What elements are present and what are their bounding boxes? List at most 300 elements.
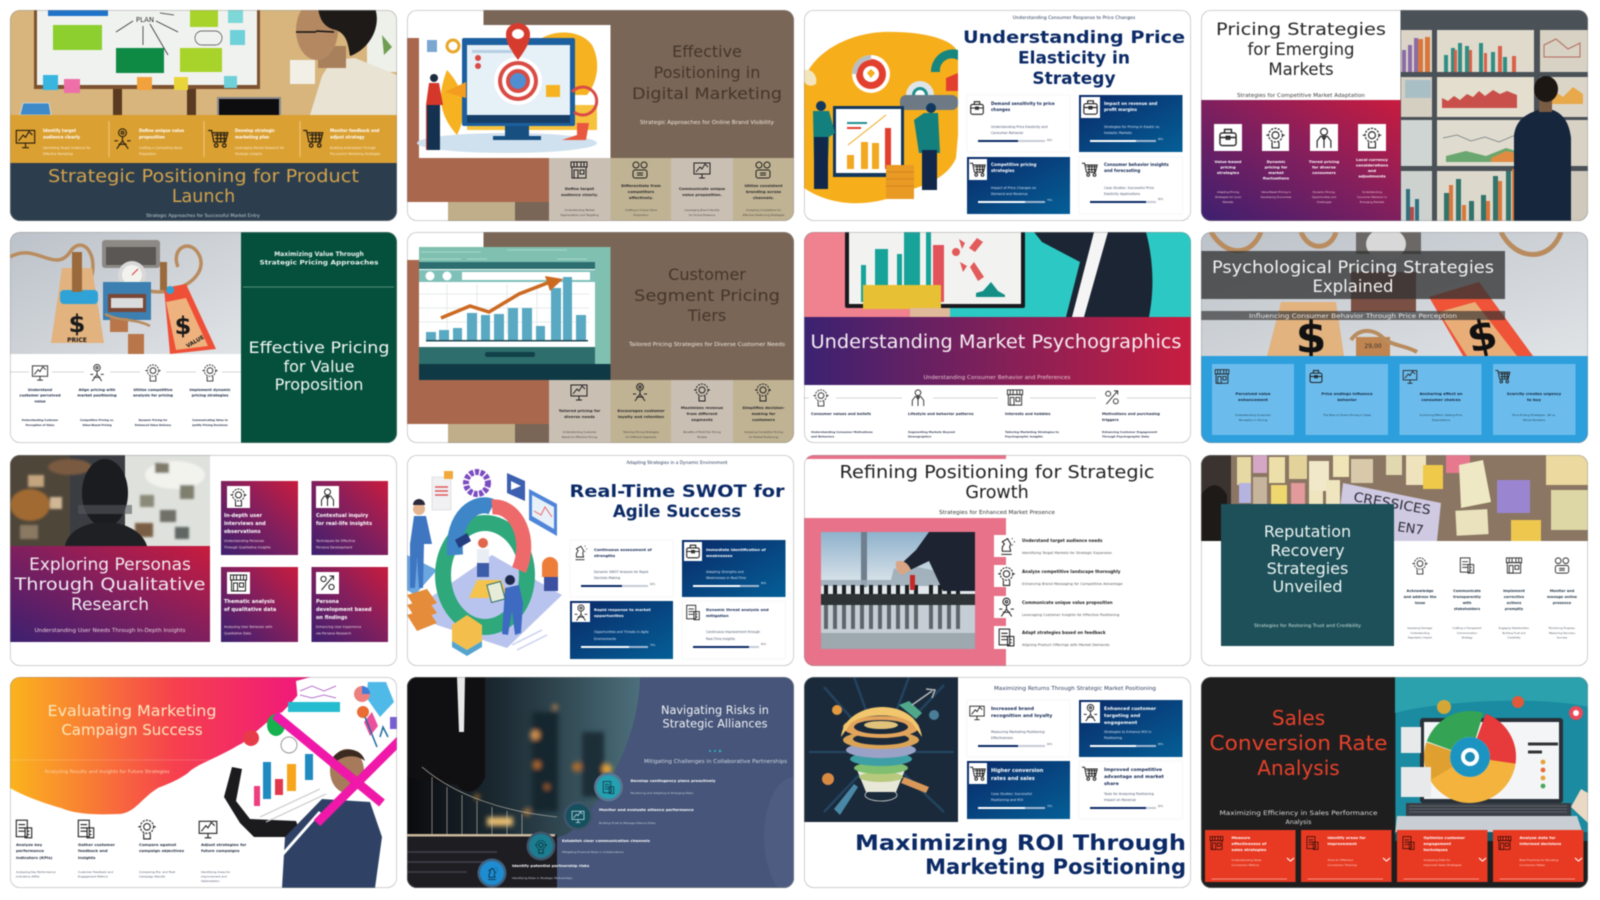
icon bbox=[571, 385, 587, 400]
heading: Price endings influence bbox=[1321, 391, 1373, 396]
heading: with bbox=[1463, 601, 1472, 605]
icon bbox=[1403, 371, 1417, 383]
icon bbox=[687, 605, 699, 620]
heading: Enhanced customer bbox=[1104, 706, 1157, 712]
icon bbox=[1307, 837, 1318, 849]
title: Refining Positioning for Strategic bbox=[840, 463, 1154, 483]
step text: adjust strategy bbox=[330, 134, 365, 140]
title: for Emerging bbox=[1247, 40, 1355, 59]
progress bar 60%: 60% bbox=[1047, 139, 1053, 142]
rust block bbox=[407, 260, 549, 424]
heading: of qualitative data bbox=[224, 607, 276, 613]
title: Understanding Price bbox=[963, 28, 1185, 48]
heading: Monitor and evaluate alliance performance bbox=[599, 807, 694, 812]
icon tile bbox=[1310, 124, 1338, 151]
detail: and Behaviors bbox=[811, 434, 835, 438]
detail: Through Qualitative Insights bbox=[223, 546, 271, 550]
title: Effective bbox=[672, 42, 742, 61]
detail: Through Psychographic Data bbox=[1102, 434, 1149, 438]
icon bbox=[1506, 558, 1522, 573]
heading: engagement bbox=[1424, 841, 1451, 846]
heading: profit margins bbox=[1104, 107, 1137, 112]
card: demand sensitivity bbox=[967, 95, 1070, 152]
title: Markets bbox=[1268, 60, 1334, 79]
progress bar 75%: 75% bbox=[1047, 805, 1053, 808]
detail: Best Practices for Boosting bbox=[1520, 858, 1558, 862]
four columns bbox=[804, 390, 1191, 438]
heading: Analyze data for bbox=[1520, 835, 1556, 840]
heading: Consumer values and beliefs bbox=[811, 412, 872, 416]
tile detail: Leveraging Brand Identity bbox=[685, 208, 720, 212]
detail: Impact on Revenue bbox=[1104, 798, 1136, 802]
card: customer targeting bbox=[1079, 700, 1182, 757]
detail: Measuring Marketing Positioning bbox=[991, 730, 1045, 734]
detail: Understanding bbox=[1410, 631, 1430, 635]
heading: strengths bbox=[594, 553, 616, 558]
icon bbox=[633, 162, 647, 178]
photo: silhouette with floating photos bbox=[10, 455, 210, 546]
heading: Impact on revenue and bbox=[1104, 101, 1157, 106]
progress bar 85%: 85% bbox=[1158, 198, 1164, 201]
tile detail: for Market Positioning bbox=[749, 435, 778, 439]
tile text: channels. bbox=[753, 195, 775, 200]
icon bbox=[78, 820, 94, 838]
teal title block bbox=[1221, 504, 1394, 646]
tan block bbox=[448, 424, 515, 443]
heading: insights bbox=[78, 855, 96, 860]
heading: on findings bbox=[316, 615, 347, 621]
heading: Adapt strategies based on feedback bbox=[1022, 630, 1106, 635]
tile: anchoring bbox=[1400, 364, 1482, 435]
brown block bbox=[484, 10, 794, 158]
detail: Engagement Metrics bbox=[78, 874, 108, 878]
subtitle: Tailored Pricing Strategies for Diverse Customer Needs bbox=[628, 342, 785, 348]
tile detail: Tailoring Pricing Strategies bbox=[622, 430, 659, 434]
icon: cart bbox=[208, 130, 228, 147]
panel: Effective Pricing for Value Proposition bbox=[10, 232, 397, 443]
pink block bbox=[804, 518, 1006, 666]
green panel bbox=[241, 232, 397, 443]
title: Real-Time SWOT for bbox=[570, 481, 785, 501]
subtitle: Mitigating Challenges in Collaborative Partnerships bbox=[644, 759, 788, 765]
detail: Customer Feedback and bbox=[78, 870, 113, 874]
tile detail: Crafting a Unique Value bbox=[625, 208, 657, 212]
progress bar 80%: 80% bbox=[761, 582, 767, 585]
detail: Elasticity Applications bbox=[1104, 192, 1140, 196]
detail: Improved Sales Strategies bbox=[1424, 863, 1462, 867]
detail: Effectiveness bbox=[991, 736, 1013, 740]
tile: interviews bbox=[221, 481, 298, 555]
label: Understand bbox=[28, 388, 53, 392]
detail: Understanding Consumer Motivations bbox=[811, 430, 873, 434]
heading: consumer choices bbox=[1421, 397, 1461, 402]
progress bar 85%: 85% bbox=[761, 643, 767, 646]
card: competitive advantage bbox=[1079, 761, 1182, 819]
detail: Price Ending Strategies: .99 vs. bbox=[1512, 413, 1556, 417]
heading: Scarcity creates urgency bbox=[1507, 391, 1562, 396]
heading: Communicate bbox=[1453, 589, 1481, 593]
label: Tiered pricing bbox=[1309, 159, 1339, 164]
label: Implement dynamic bbox=[189, 388, 231, 392]
photo: enlarged price tags: $ bbox=[1463, 309, 1501, 363]
gradient title block bbox=[10, 546, 210, 642]
panel: Pricing Strategies for Emerging Markets bbox=[1201, 10, 1588, 221]
detail: Assessing Damage: bbox=[1407, 626, 1433, 630]
card: competitive pricing bbox=[967, 157, 1070, 214]
tile text: branding across bbox=[746, 189, 782, 194]
subtitle: Strategic Approaches for Successful Market Entry bbox=[146, 213, 260, 219]
progress bar 80%: 80% bbox=[1158, 743, 1164, 746]
header text: Maximizing Value Through bbox=[274, 251, 364, 258]
heading: transparently bbox=[1453, 595, 1481, 599]
tan block bbox=[448, 202, 515, 221]
step text: Monitor feedback and bbox=[330, 128, 380, 133]
tile text: Encourages customer bbox=[617, 408, 665, 413]
heading: targeting and bbox=[1104, 713, 1140, 719]
heading: Anchoring effect on bbox=[1419, 391, 1463, 396]
icon: cart bbox=[303, 130, 323, 147]
panel: Strategic Positioning for Product Launch bbox=[10, 0, 397, 221]
title: for Value bbox=[283, 357, 355, 376]
detail: Tools for Effective bbox=[1326, 858, 1353, 862]
icon bbox=[526, 832, 556, 860]
label: Dynamic bbox=[1267, 159, 1286, 164]
tile detail: Needs for Effective Pricing bbox=[562, 435, 598, 439]
chevron bbox=[1287, 858, 1294, 861]
subtitle: Strategies for Competitive Market Adaptation bbox=[1237, 93, 1365, 99]
title: Explained bbox=[1312, 277, 1394, 296]
icon bbox=[1007, 390, 1023, 405]
tile text: audience clearly. bbox=[561, 192, 599, 197]
illustration: analysts with chart and telescope bbox=[804, 32, 958, 203]
detail: Success bbox=[1557, 636, 1568, 640]
detail: Understanding bbox=[1362, 190, 1382, 194]
illustration: presenter pointing at monitor bbox=[804, 229, 1191, 317]
tile text: customers bbox=[752, 417, 776, 422]
risk step: identify risks bbox=[478, 858, 590, 888]
icon bbox=[571, 162, 587, 178]
panel: Customer Segment Pricing Tiers bbox=[407, 232, 794, 443]
title: Sales bbox=[1272, 706, 1325, 730]
tile text: diverse needs bbox=[564, 414, 596, 419]
detail: Communication bbox=[1457, 631, 1478, 635]
detail: Competitive Pricing vs. bbox=[80, 418, 114, 422]
icon bbox=[756, 162, 770, 178]
detail: Conversion Tracking bbox=[1328, 863, 1357, 867]
tile detail: Segmentation and Targeting bbox=[560, 213, 599, 217]
panel: Effective Positioning in Digital Marketing bbox=[407, 10, 794, 221]
card: behavior insights bbox=[1079, 157, 1182, 214]
gradient block bbox=[1201, 100, 1400, 221]
tile text: effectively. bbox=[629, 195, 654, 200]
tile detail: Effective Positioning Strategies bbox=[743, 213, 785, 217]
photo: suit and blurred city bridge bbox=[407, 677, 640, 888]
tile detail: Models bbox=[697, 435, 707, 439]
subtitle: Analyzing Results and Insights for Future Strategies bbox=[44, 769, 170, 775]
detail: Understanding Consumer bbox=[1235, 413, 1272, 417]
heading: Rapid response to market bbox=[594, 607, 651, 612]
detail: The Role of Charm Pricing in Sales bbox=[1322, 413, 1372, 417]
title: Marketing Positioning bbox=[925, 855, 1186, 879]
heading: development based bbox=[316, 607, 372, 613]
blue band bbox=[1201, 356, 1588, 443]
label: Align pricing with bbox=[79, 388, 116, 392]
icon bbox=[633, 384, 647, 401]
step detail: Effective Marketing bbox=[43, 152, 73, 156]
title: Launch bbox=[172, 187, 235, 207]
detail: Persona Development bbox=[316, 546, 353, 550]
detail: Building Trust and bbox=[1502, 631, 1526, 635]
card: conversion rates bbox=[967, 761, 1070, 819]
heading: In-depth user bbox=[224, 513, 263, 519]
title: Digital Marketing bbox=[632, 84, 782, 103]
heading: indicators (KPIs) bbox=[16, 855, 53, 860]
tile detail: Understanding Customer bbox=[563, 430, 597, 434]
item: audience needs bbox=[994, 535, 1112, 557]
subtitle: Strategic Approaches for Online Brand Visibility bbox=[640, 120, 774, 126]
panel: Sales Conversion Rate Analysis bbox=[1201, 677, 1588, 888]
icon bbox=[1210, 837, 1223, 849]
heading: Interests and hobbies bbox=[1005, 412, 1051, 416]
card: opportunities bbox=[570, 601, 673, 659]
progress bar 60%: 60% bbox=[1047, 743, 1053, 746]
detail: Tailoring Marketing Strategies to bbox=[1005, 430, 1059, 434]
detail: Real-Time Insights bbox=[706, 637, 735, 641]
tile text: Differentiate from bbox=[621, 183, 661, 188]
label: strategies bbox=[1217, 170, 1240, 175]
icon bbox=[994, 596, 1018, 618]
subtitle: Maximizing Efficiency in Sales Performance bbox=[1220, 810, 1378, 817]
icon bbox=[16, 820, 32, 838]
panel: Understanding Market Psychographics bbox=[804, 229, 1191, 443]
pink top strip bbox=[804, 455, 1006, 459]
icon bbox=[1403, 837, 1414, 849]
detail: Emerging Markets bbox=[1360, 200, 1385, 204]
heading: Develop contingency plans proactively bbox=[630, 778, 716, 783]
chevron bbox=[1479, 858, 1486, 861]
heading: Perceived value bbox=[1236, 391, 1271, 396]
icon bbox=[684, 542, 702, 561]
detail: Inelastic Markets bbox=[1104, 131, 1132, 135]
tile detail: for Different Segments bbox=[626, 435, 657, 439]
title: Positioning in bbox=[654, 63, 760, 82]
icon bbox=[694, 384, 710, 401]
detail: Identifying Target Markets for Strategic Expansion bbox=[1022, 551, 1112, 555]
title: Customer bbox=[668, 265, 746, 284]
heading: Competitive pricing bbox=[991, 162, 1036, 167]
risk step: communication bbox=[526, 832, 651, 860]
step detail: Strategic Insights bbox=[235, 152, 262, 156]
heading: changes bbox=[991, 107, 1011, 112]
rust block bbox=[407, 38, 549, 202]
heading: Motivations and purchasing bbox=[1102, 412, 1160, 416]
heading: future campaigns bbox=[201, 848, 240, 853]
panel: Real-Time SWOT for Agile Success bbox=[407, 455, 794, 666]
four steps bbox=[10, 365, 241, 427]
brown square bbox=[515, 424, 549, 443]
icon bbox=[594, 772, 623, 802]
detail: Perception of Value bbox=[26, 423, 55, 427]
heading: Optimize customer bbox=[1424, 835, 1465, 840]
label: Value-based bbox=[1215, 159, 1242, 164]
label: fluctuations bbox=[1263, 176, 1290, 180]
label: market bbox=[1268, 170, 1284, 175]
detail: Justify Pricing Decisions bbox=[191, 423, 228, 427]
detail: Whole Numbers bbox=[1523, 418, 1546, 422]
title: Unveiled bbox=[1272, 577, 1343, 596]
icon bbox=[1498, 837, 1511, 849]
detail: Crafting a Transparent bbox=[1453, 626, 1481, 630]
label: for diverse bbox=[1312, 164, 1336, 170]
icon bbox=[316, 486, 339, 508]
heading: Continuous assessment of bbox=[594, 547, 652, 552]
title: Agile Success bbox=[613, 501, 741, 521]
detail: Comparing Pre- and Post- bbox=[139, 870, 176, 874]
decorative dots bbox=[709, 750, 721, 752]
photo: wall of sticky notes: CRESSICES bbox=[1352, 490, 1432, 518]
card: revenue impact bbox=[1079, 95, 1182, 152]
heading: recognition and loyalty bbox=[991, 713, 1052, 719]
subtitle overlay bbox=[1201, 311, 1505, 320]
tile text: Maximizes revenue bbox=[681, 405, 723, 410]
tile: perceived value bbox=[1212, 364, 1294, 435]
detail: Conversion Metrics bbox=[1232, 863, 1260, 867]
detail: Qualitative Data bbox=[224, 632, 251, 636]
heading: Compare against bbox=[139, 842, 176, 847]
detail: Mitigating Financial Risks in Collaborations bbox=[562, 850, 624, 854]
detail: Understanding Sales bbox=[1232, 858, 1262, 862]
label: considerations bbox=[1356, 162, 1389, 168]
heading: Adjust strategies for bbox=[201, 842, 246, 847]
detail: Psychographic Insights bbox=[1005, 434, 1043, 438]
detail: Aligning Product Offerings with Market Demands bbox=[1022, 643, 1110, 647]
title: Elasticity in bbox=[1018, 48, 1130, 68]
label: analysis for pricing bbox=[133, 394, 173, 398]
tile detail: Analyzing Competitor Pricing bbox=[744, 430, 783, 434]
title: Conversion Rate bbox=[1210, 731, 1388, 755]
icon bbox=[32, 366, 48, 380]
tile: optimize engagement bbox=[1397, 830, 1488, 882]
icon bbox=[576, 546, 587, 560]
photo: man facing wall of dashboards bbox=[1400, 10, 1588, 221]
subtitle: Understanding User Needs Through In-Depth Insights bbox=[34, 628, 186, 634]
header text: Strategic Pricing Approaches bbox=[260, 260, 379, 266]
detail: Strategies for Pricing in Elastic vs. bbox=[1104, 125, 1160, 129]
step detail: Identifying Target Audience for bbox=[43, 146, 91, 150]
heading: behavior bbox=[1337, 397, 1357, 402]
step text: marketing plan bbox=[235, 134, 269, 140]
icon: tower bbox=[114, 129, 131, 149]
card: strengths bbox=[570, 540, 673, 597]
icon bbox=[1106, 391, 1118, 404]
icon tile bbox=[1358, 124, 1386, 151]
icon bbox=[1555, 558, 1569, 573]
detail: Communicating Value to bbox=[192, 418, 228, 422]
detail: Adapting Pricing bbox=[1217, 190, 1239, 194]
label: adjustments bbox=[1358, 174, 1386, 178]
panel: Understanding Price Elasticity in Strategy bbox=[804, 10, 1191, 221]
detail: Positioning bbox=[1104, 736, 1122, 740]
subtitle: Strategies for Restoring Trust and Credibility bbox=[1254, 623, 1361, 629]
heading: Understand target audience needs bbox=[1022, 538, 1103, 543]
step detail: Pre-Launch Marketing Strategies bbox=[330, 152, 381, 156]
illustration: marketing funnel bbox=[804, 677, 958, 822]
title: Understanding Market Psychographics bbox=[810, 332, 1182, 353]
icon bbox=[969, 159, 987, 180]
heading: Persona bbox=[316, 599, 339, 605]
icon bbox=[572, 603, 590, 622]
title: Reputation bbox=[1264, 522, 1351, 541]
card: weaknesses bbox=[682, 540, 786, 597]
tile detail: Proposition bbox=[634, 213, 649, 217]
icon bbox=[755, 384, 771, 401]
title: Through Qualitative bbox=[13, 575, 206, 595]
title: Analysis bbox=[1257, 756, 1340, 780]
card: brand recognition bbox=[967, 700, 1070, 757]
photo: wall of sticky notes: EN7 bbox=[1396, 520, 1424, 539]
subtitle: Analysis bbox=[1286, 819, 1311, 826]
step text: Define unique value bbox=[139, 128, 184, 133]
item: adapt strategies bbox=[994, 626, 1110, 649]
illustration: laptop with rising chart bbox=[419, 247, 610, 380]
heading: Analyze key bbox=[16, 842, 43, 847]
icon bbox=[564, 802, 592, 830]
icon bbox=[994, 535, 1018, 557]
detail: Optimization bbox=[201, 879, 220, 883]
photo: businessperson placing red figure bbox=[821, 532, 975, 649]
title overlay bbox=[1201, 251, 1505, 299]
detail: Tools for Analyzing Positioning bbox=[1103, 792, 1154, 796]
detail: Opportunities and bbox=[1312, 195, 1336, 199]
step detail: Proposition bbox=[139, 152, 156, 156]
step text: proposition bbox=[139, 134, 165, 140]
detail: Adapting Strengths and bbox=[706, 570, 744, 574]
title: Strategic Alliances bbox=[663, 718, 768, 730]
icon bbox=[199, 821, 217, 838]
icon bbox=[1412, 558, 1428, 574]
top subtitle: Maximizing Returns Through Strategic Market Positioning bbox=[994, 686, 1156, 692]
item: competitive landscape bbox=[994, 565, 1123, 587]
heading: Implement bbox=[1503, 589, 1525, 593]
heading: Identify areas for bbox=[1328, 835, 1366, 840]
heading: Higher conversion bbox=[991, 768, 1044, 774]
heading: rates and sales bbox=[991, 776, 1035, 782]
heading: stakeholders bbox=[1454, 607, 1480, 611]
subtitle: Influencing Consumer Behavior Through Price Perception bbox=[1249, 313, 1457, 320]
heading: sales strategies bbox=[1232, 847, 1267, 852]
tile detail: Benefits of Multi-Tier Pricing bbox=[683, 430, 721, 434]
heading: manage online bbox=[1547, 595, 1578, 599]
heading: opportunities bbox=[594, 613, 624, 618]
heading: share bbox=[1104, 781, 1119, 787]
detail: Value-Based Pricing bbox=[82, 423, 112, 427]
icon bbox=[90, 365, 104, 381]
title: Research bbox=[71, 595, 149, 615]
photo: price and value tags with rope: PRICE bbox=[67, 337, 87, 344]
icon bbox=[994, 565, 1018, 587]
top subtitle: Understanding Consumer Response to Price Changes bbox=[1013, 15, 1136, 21]
heading: feedback and bbox=[78, 848, 108, 853]
heading: actions bbox=[1507, 601, 1521, 605]
icon bbox=[969, 763, 987, 784]
icon bbox=[694, 163, 710, 178]
detail: Consumer Behavior in bbox=[1357, 195, 1387, 199]
detail: Analyzing Data for bbox=[1424, 858, 1451, 862]
panel: Exploring Personas Through Qualitative Research bbox=[10, 455, 397, 666]
icon bbox=[971, 102, 983, 114]
heading: advantage and market bbox=[1104, 774, 1165, 780]
panel: Reputation Recovery Strategies Unveiled bbox=[1201, 455, 1588, 666]
